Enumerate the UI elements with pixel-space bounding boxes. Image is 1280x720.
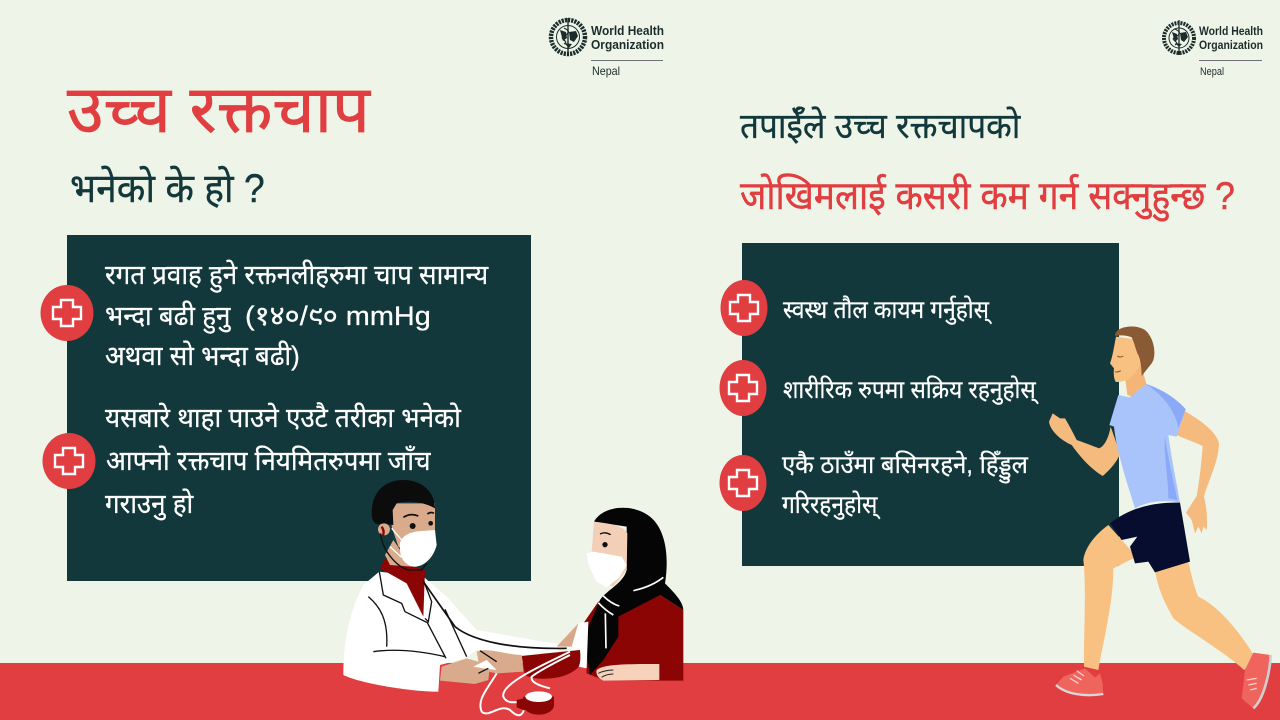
red floor band [0,663,1280,720]
rear leg [1155,562,1257,670]
subtitle: what is it: भनेको के हो ? [70,167,265,211]
text: healthy weight: स्वस्थ तौल कायम गर्नुहोस् [783,296,989,324]
bullet icon: plus 2 [720,360,766,416]
text: be active: शारीरिक रुपमा सक्रिय रहनुहोस् [783,376,1036,404]
shorts [1110,503,1190,572]
text: keep moving: गरिरहनुहोस् [782,491,877,519]
logo: WHO Nepal right [1162,20,1263,78]
text: definition: रगत प्रवाह हुने रक्तनलीहरुमा चाप सामान्य [105,260,488,290]
text: definition: (१४०/९० mmHg [245,301,431,331]
front leg [1083,525,1137,670]
panel: prevention tips [720,243,1119,566]
bullet icon: plus 1 [40,285,94,341]
bullet icon: plus 3 [720,455,766,511]
text: how to know [104,402,462,520]
logo: WHO Nepal left: World Health [591,23,664,38]
rear shoe [1242,653,1271,708]
text: how to know: आफ्नो रक्तचाप नियमितरुपमा जाँच [106,446,431,476]
front shoe [1056,668,1103,696]
text: definition: भन्दा बढी हुनु [105,301,230,331]
illustration: jogging man [1049,326,1272,710]
heading: how can you: तपाईँले उच्च रक्तचापको [740,107,1020,146]
text: how to know: गराउनु हो [105,489,193,519]
front arm [1049,413,1120,476]
heading: reduce the risk: जोखिमलाई कसरी कम गर्न सक्नुहुन्छ ? [740,175,1235,218]
bullet icon: plus 1 [720,280,768,336]
logo: WHO Nepal left: Organization [591,37,664,52]
patient [557,508,683,681]
title: high blood pressure: उच्च रक्तचाप [67,72,370,146]
logo: WHO Nepal right: Nepal [1200,66,1224,78]
doctor [343,480,580,715]
bullet icon: plus 2 [42,433,96,489]
panel background [742,243,1119,566]
text: definition: अथवा सो भन्दा बढी) [105,341,300,371]
text: how to know: यसबारे थाहा पाउने एउटै तरीका भनेको [105,403,461,433]
text: keep moving [782,450,1028,520]
illustration: doctor measuring patient's blood pressure [343,480,684,716]
back arm [1177,411,1219,533]
neck and head [1110,327,1154,398]
logo: WHO Nepal right: World Health [1199,24,1263,38]
panel background [67,235,531,581]
t-shirt [1109,384,1186,508]
logo: WHO Nepal right: Organization [1199,38,1263,52]
logo: WHO Nepal left [548,18,664,78]
panel: definition [40,235,531,581]
text: definition [104,259,489,371]
text: keep moving: एकै ठाउँमा बसिनरहने, हिँड्डुल [782,451,1028,479]
logo: WHO Nepal left: Nepal [592,64,620,78]
